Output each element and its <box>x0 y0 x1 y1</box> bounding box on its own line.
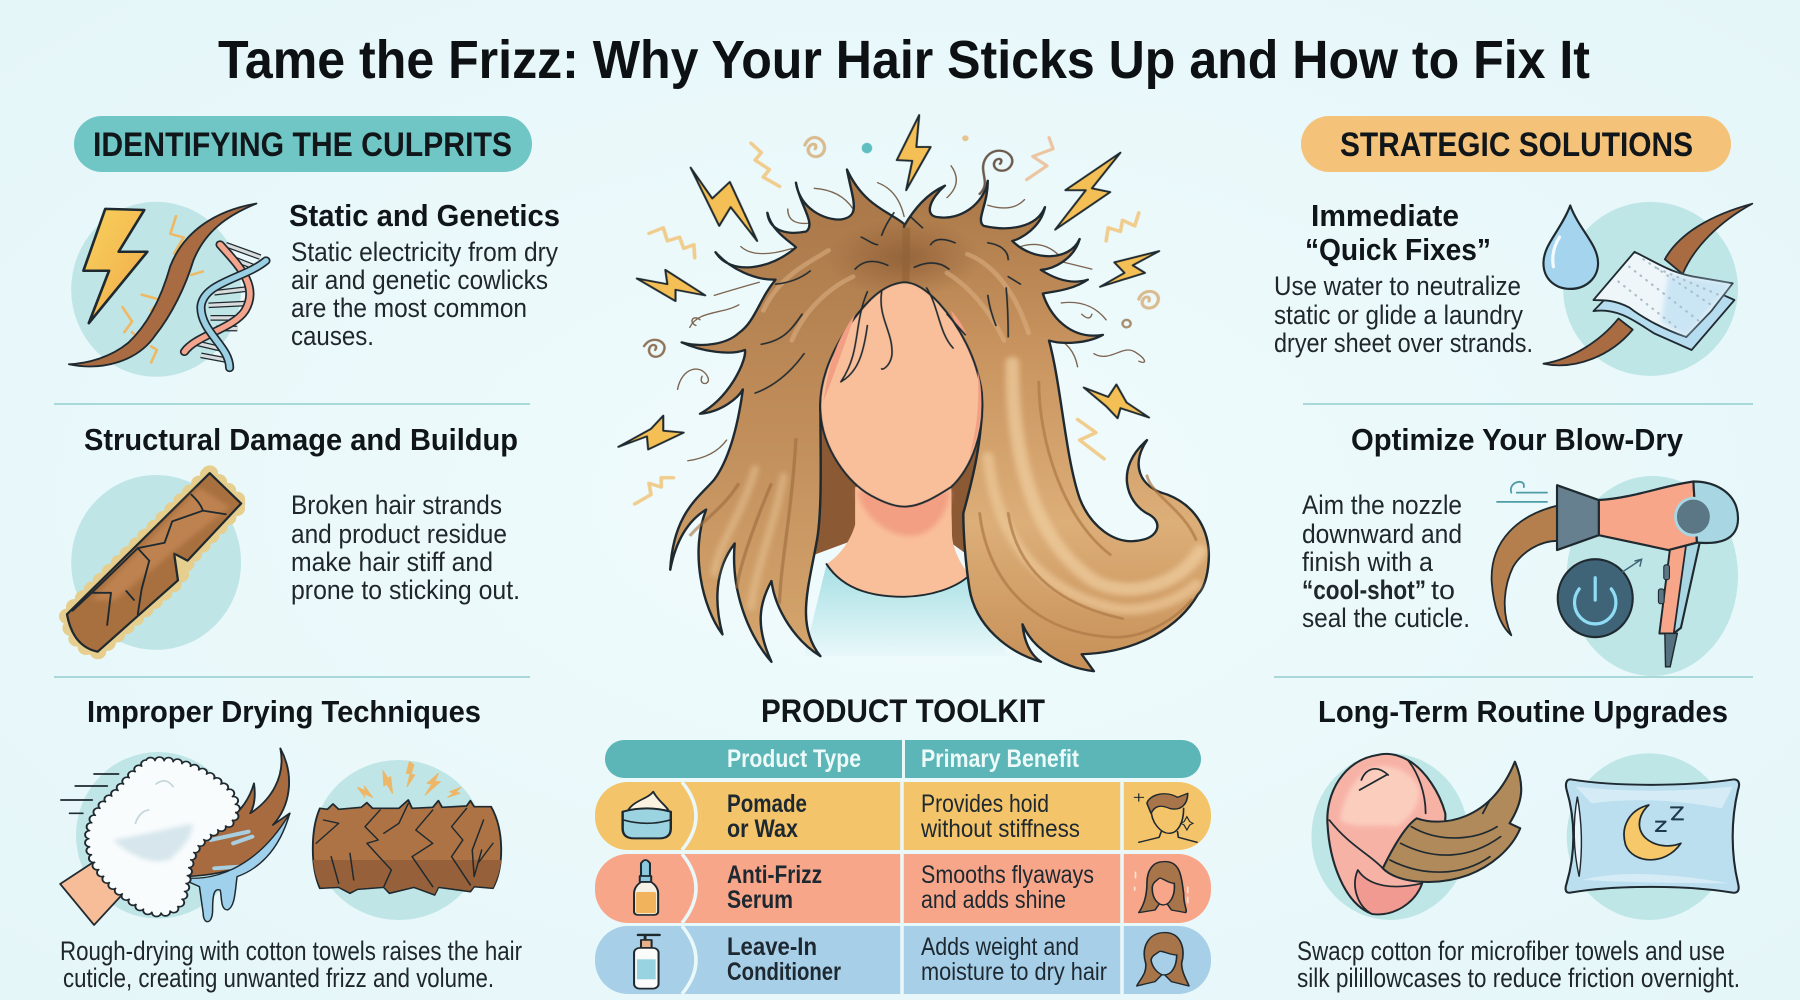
panel: identifying the culprits <box>54 116 560 993</box>
table row: leave-in conditioner: Conditioner <box>727 958 841 986</box>
text: blow-dry: seal the cuticle. <box>1302 603 1470 633</box>
text: structural damage: prone to sticking out. <box>291 575 520 605</box>
icon: squiggles and spirals <box>635 137 1158 504</box>
text: blow-dry: to <box>1431 575 1455 605</box>
icon: static and DNA <box>69 202 266 377</box>
icon: styled face <box>1134 793 1197 842</box>
heading pill: culprits: IDENTIFYING THE CULPRITS <box>93 126 512 164</box>
icon: cracked hair shaft <box>67 473 241 652</box>
icon: jar <box>623 792 671 838</box>
text: improper drying: Rough-drying with cotton towels raises the hair <box>60 936 522 966</box>
text: static and genetics: causes. <box>291 321 374 351</box>
subheading: blow-dry: Optimize Your Blow-Dry <box>1351 422 1684 457</box>
subheading: quick fixes: “Quick Fixes” <box>1305 232 1491 267</box>
text: quick fixes: Use water to neutralize <box>1274 271 1521 301</box>
icon: moisturized hair face <box>1137 933 1189 986</box>
text: improper drying: cuticle, creating unwanted frizz and volume. <box>63 963 494 993</box>
table header <box>605 740 1201 778</box>
table header: Product Type <box>727 745 861 773</box>
text: blow-dry: Aim the nozzle <box>1302 490 1462 520</box>
table row: pomade or wax: or Wax <box>727 815 798 843</box>
text: quick fixes: dryer sheet over strands. <box>1274 328 1533 358</box>
icon: pump bottle <box>634 935 659 989</box>
title: Tame the Frizz: Why Your Hair Sticks Up and How to Fix It <box>218 30 1590 90</box>
text: static and genetics: are the most common <box>291 293 527 323</box>
table row: pomade or wax: Pomade <box>727 790 807 818</box>
panel: product toolkit <box>595 693 1211 994</box>
text: long-term upgrades: Swacp cotton for microfiber towels and use <box>1297 936 1725 966</box>
heading pill: culprits <box>74 116 532 172</box>
icon: lightning bolts <box>618 115 1159 449</box>
icon: towel rubbing hair <box>60 748 290 925</box>
subheading: structural damage: Structural Damage and Buildup <box>84 422 518 457</box>
table row: anti-frizz serum: Anti-Frizz <box>727 861 822 889</box>
subheading: static and genetics: Static and Genetics <box>289 198 560 233</box>
icon: microfiber towel wrap <box>1311 753 1521 920</box>
icon: serum bottle <box>634 860 658 915</box>
subheading: quick fixes: Immediate <box>1311 198 1459 233</box>
table row: leave-in conditioner: Leave-In <box>727 933 817 961</box>
heading pill: solutions: STRATEGIC SOLUTIONS <box>1340 126 1693 164</box>
text: quick fixes: static or glide a laundry <box>1274 300 1523 330</box>
illustration: frizzy hair portrait <box>618 115 1209 671</box>
table row: anti-frizz serum <box>595 854 1211 923</box>
table row: anti-frizz serum: Smooths flyaways <box>921 861 1094 889</box>
icon: smooth hair face <box>1135 862 1188 913</box>
text: structural damage: Broken hair strands <box>291 490 502 520</box>
table row: anti-frizz serum: Serum <box>727 886 793 914</box>
text: blow-dry: finish with a <box>1302 547 1434 577</box>
table row: leave-in conditioner <box>595 926 1211 994</box>
subheading: long-term upgrades: Long-Term Routine Upgrades <box>1318 694 1728 729</box>
table row: pomade or wax: Provides hoid <box>921 790 1049 818</box>
table row: leave-in conditioner: Adds weight and <box>921 933 1079 961</box>
text: structural damage: make hair stiff and <box>291 547 493 577</box>
table row: leave-in conditioner: moisture to dry hair <box>921 958 1107 986</box>
text: static and genetics: Static electricity from dry <box>291 237 558 267</box>
subheading: improper drying: Improper Drying Techniques <box>87 694 481 729</box>
table row: pomade or wax: without stiffness <box>920 815 1080 843</box>
heading pill: solutions <box>1301 116 1731 172</box>
icon: raised cuticle shaft <box>313 760 501 920</box>
text: blow-dry: “cool-shot” <box>1302 575 1426 605</box>
icon: hair dryer <box>1492 476 1738 676</box>
icon: silk pillow with moon <box>1566 753 1739 920</box>
heading: product toolkit: PRODUCT TOOLKIT <box>761 693 1045 729</box>
table row: pomade or wax <box>595 782 1211 850</box>
text: blow-dry: downward and <box>1302 519 1462 549</box>
text: static and genetics: air and genetic cowlicks <box>291 265 548 295</box>
table row: anti-frizz serum: and adds shine <box>921 886 1066 914</box>
icon: water drop and dryer sheet <box>1543 202 1752 376</box>
table header: Primary Benefit <box>921 745 1080 773</box>
text: structural damage: and product residue <box>291 519 507 549</box>
panel: strategic solutions <box>1274 116 1753 993</box>
